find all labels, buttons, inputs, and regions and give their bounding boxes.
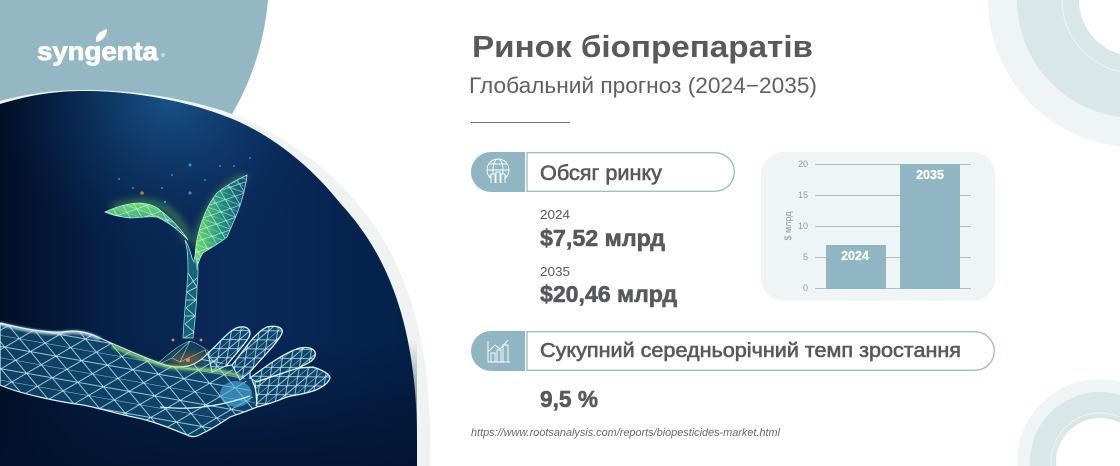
icon: globe bbox=[487, 159, 509, 183]
2024 value: 2024 bbox=[540, 207, 570, 222]
stem mesh bbox=[184, 273, 197, 338]
section heading: Сукупний середньорічний темп зростання bbox=[540, 340, 961, 362]
section tab with chart icon bbox=[471, 331, 525, 371]
thumb bbox=[255, 367, 330, 407]
decorative rings: bottom right bbox=[1017, 379, 1120, 466]
seedling bbox=[105, 175, 247, 338]
2035 value: $20,46 млрд bbox=[540, 281, 677, 307]
left leaf bbox=[105, 203, 188, 240]
section header box bbox=[527, 332, 994, 370]
icon: logo leaf bbox=[96, 29, 107, 42]
sparkles bbox=[118, 157, 251, 203]
subtitle: Глобальний прогноз (2024−2035) bbox=[469, 73, 817, 98]
decorative rings: top right bbox=[988, 0, 1120, 146]
title: Ринок біопрепаратів bbox=[472, 29, 813, 64]
seedling glow bbox=[112, 177, 246, 245]
right leaf mesh bbox=[195, 175, 247, 270]
2024 value: $7,52 млрд bbox=[540, 225, 665, 251]
soil in palm bbox=[155, 339, 226, 373]
bar 2035: 2035 bbox=[916, 168, 944, 182]
CAGR value: 9,5 % bbox=[540, 386, 598, 412]
photo: hand holding glowing seedling bbox=[0, 90, 430, 466]
floor shade bbox=[0, 340, 417, 466]
y-axis ticks bbox=[798, 159, 808, 293]
section tab with globe icon bbox=[471, 152, 525, 192]
hand bbox=[0, 323, 330, 437]
logo: syngenta: syngenta bbox=[37, 36, 159, 66]
2035 value: 2035 bbox=[540, 264, 570, 279]
thumb-base highlight bbox=[220, 381, 252, 407]
left leaf mesh bbox=[105, 203, 188, 240]
icon: growth chart bbox=[488, 340, 510, 362]
palm crease bbox=[160, 380, 257, 408]
y-axis ticks: 5 bbox=[803, 252, 808, 262]
bar chart panel bbox=[761, 152, 995, 301]
2035 value bbox=[540, 264, 677, 307]
bar 2035 bbox=[900, 164, 960, 289]
soil sparks bbox=[172, 339, 206, 365]
section: market size bbox=[471, 152, 734, 307]
divider under heading bbox=[471, 122, 570, 123]
y-axis label: $ млрд bbox=[783, 211, 793, 240]
section: CAGR bbox=[471, 331, 994, 412]
palm green glow bbox=[112, 346, 240, 376]
stem bbox=[183, 240, 198, 338]
arm top glow bbox=[0, 324, 100, 339]
2024 value bbox=[540, 207, 665, 251]
section header box bbox=[527, 153, 734, 191]
night background bbox=[0, 91, 417, 466]
y-axis ticks: 0 bbox=[803, 283, 808, 293]
bar 2024: 2024 bbox=[841, 249, 869, 263]
top glow bbox=[0, 91, 417, 466]
bar 2024 bbox=[826, 245, 886, 289]
hand mesh bbox=[0, 323, 257, 437]
finger 2 bbox=[232, 326, 282, 380]
teal corner shape bbox=[0, 0, 268, 130]
hand silhouette bbox=[0, 323, 330, 437]
y-axis ticks: 15 bbox=[798, 190, 808, 200]
finger 3 bbox=[250, 347, 315, 382]
y-axis ticks: 10 bbox=[798, 221, 808, 231]
section heading: Обсяг ринку bbox=[540, 162, 662, 185]
right leaf bbox=[195, 175, 247, 270]
photo light border bbox=[0, 90, 430, 466]
y-axis ticks: 20 bbox=[798, 159, 808, 169]
finger 1 bbox=[208, 327, 250, 372]
source link: https://www.rootsanalysis.com/reports/biopesticides-market.html bbox=[471, 427, 781, 439]
